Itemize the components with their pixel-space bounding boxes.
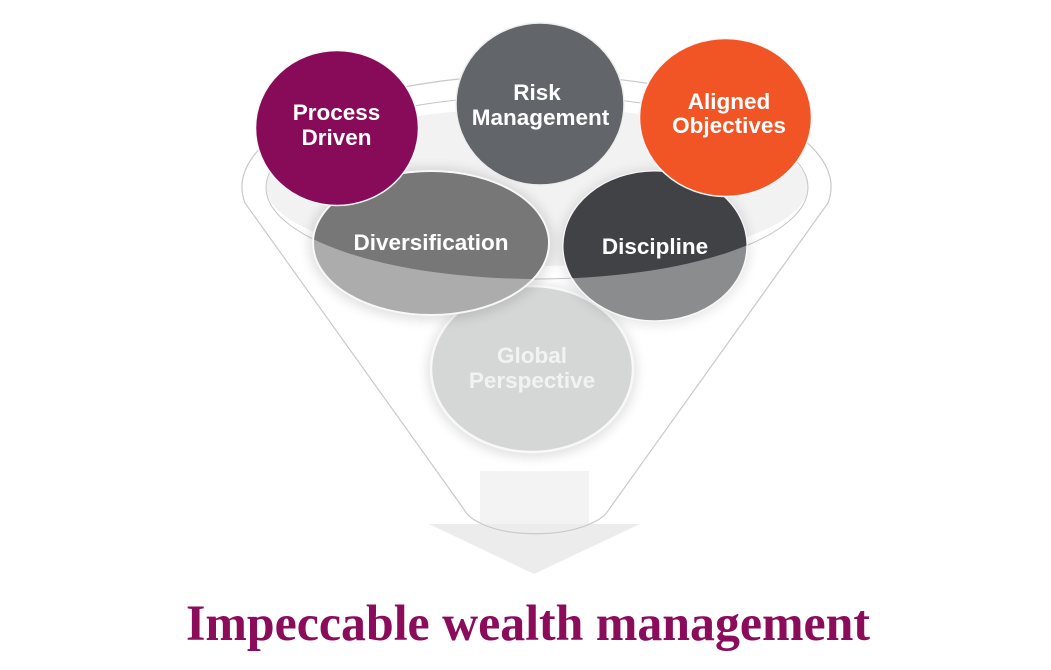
circle: Aligned Objectives: Aligned (688, 89, 770, 114)
output arrow (429, 524, 640, 574)
funnel mouth outline (266, 96, 808, 279)
circle: Risk Management: Management (472, 105, 610, 130)
funnel spout block (480, 471, 589, 525)
circle: Global Perspective (428, 285, 636, 457)
circle: Diversification (309, 168, 553, 320)
circle: Discipline: Discipline (602, 234, 708, 259)
circle: Discipline (560, 169, 750, 325)
circle: Diversification: Diversification (353, 230, 509, 255)
circle: Risk Management (456, 23, 624, 185)
circle: Process Driven (256, 50, 418, 206)
funnel mouth fill (266, 108, 808, 266)
circle: Aligned Objectives: Objectives (672, 113, 786, 138)
funnel outer outline (242, 75, 831, 534)
title: Impeccable wealth management (186, 596, 870, 652)
circle: Risk Management: Risk (513, 80, 561, 105)
circle: Process Driven: Process (293, 100, 380, 125)
circle: Global Perspective: Perspective (469, 368, 595, 393)
infographic: funnel of wealth management principles (188, 22, 870, 651)
circle: Process Driven: Driven (301, 125, 372, 150)
circle: Aligned Objectives (640, 38, 812, 196)
circle: Global Perspective: Global (497, 343, 567, 368)
